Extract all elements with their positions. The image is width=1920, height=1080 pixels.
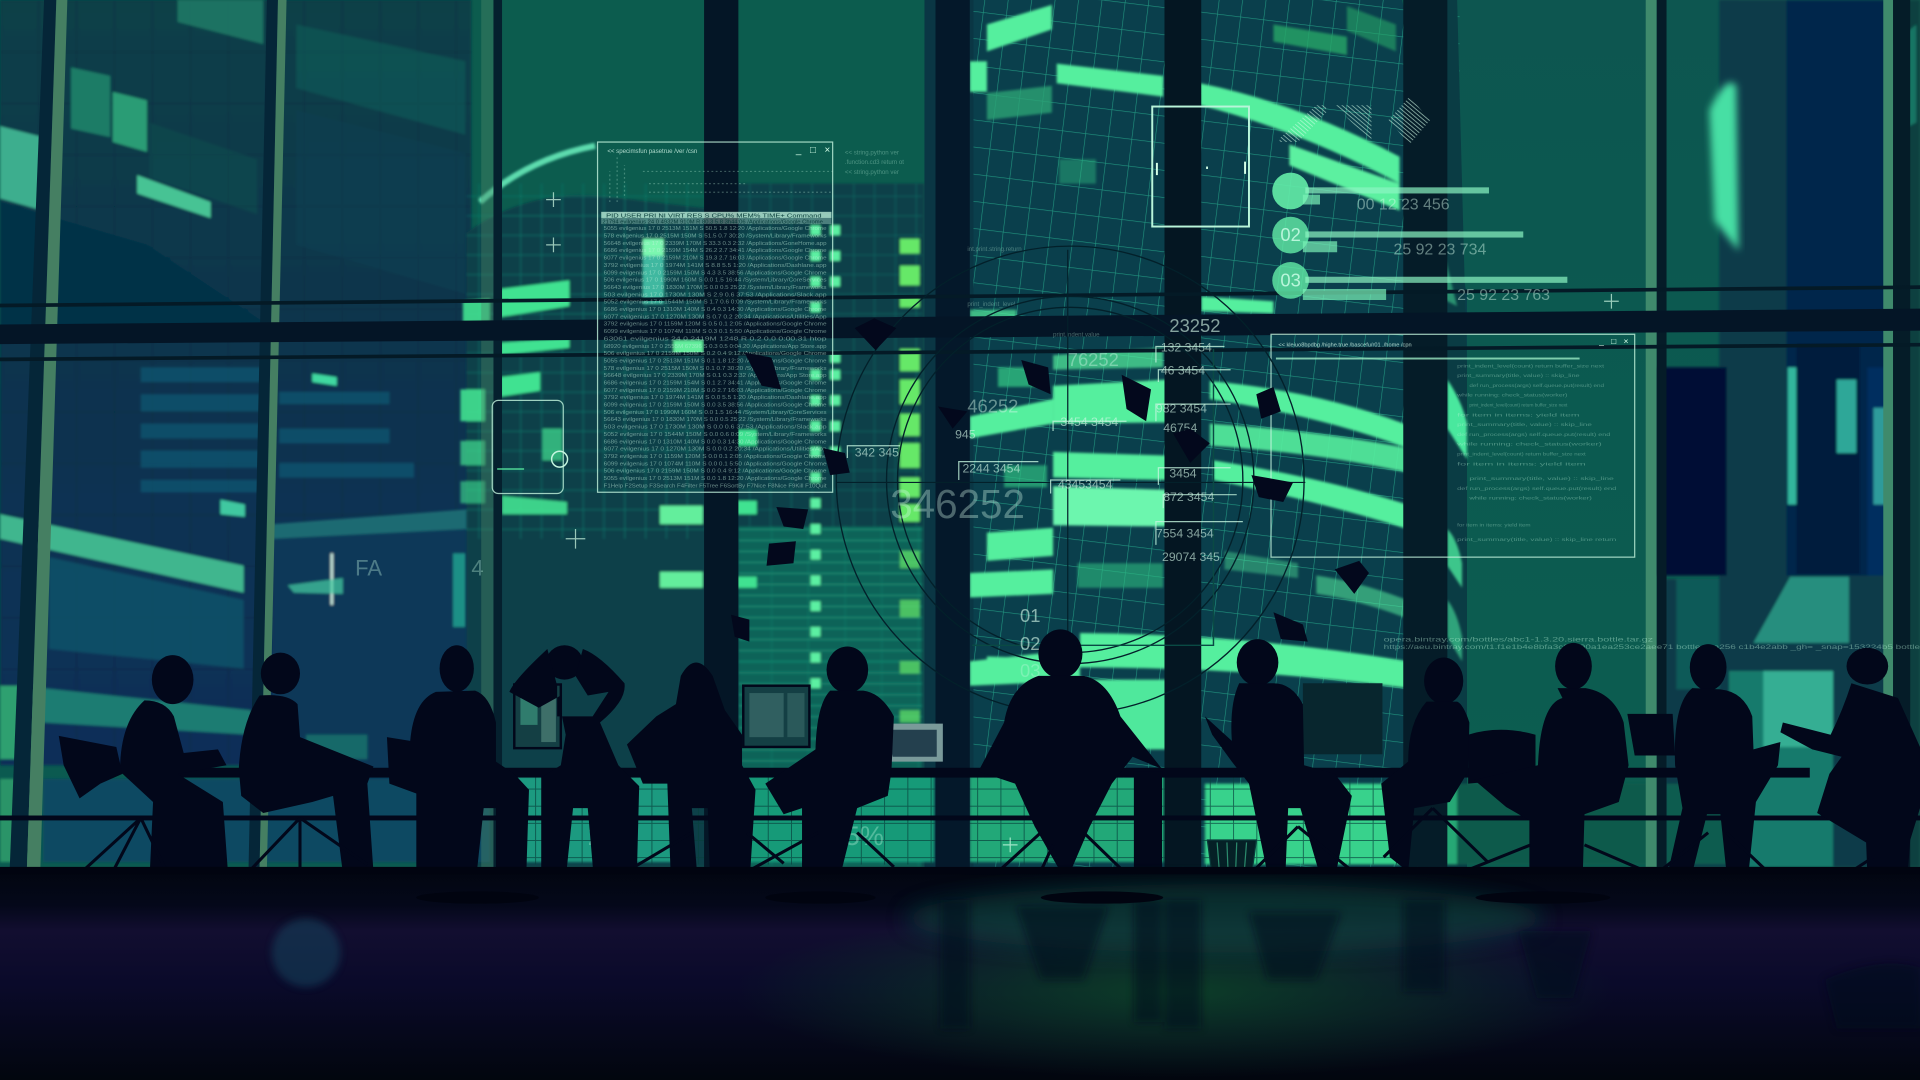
terminal rows: 3792 evilgenius 17 0 1974M 141M S 0.0 5.5 1:20 /Applications/Dashlane.app bbox=[604, 395, 827, 401]
person 9 bbox=[1381, 658, 1536, 872]
lower window glow bbox=[0, 776, 1733, 864]
person 5 bbox=[627, 662, 784, 884]
terminal rows: 506 evilgenius 17 0 2159M 150M S 0.0 0.4 9:12 /Applications/Google Chrome bbox=[604, 469, 827, 475]
faded lower numbers: 20 bbox=[588, 821, 618, 851]
terminal title: << specimsfun pasetrue /ver /csn bbox=[607, 148, 697, 155]
data labels: 2244 3454 bbox=[962, 462, 1020, 476]
laptops bbox=[514, 683, 1382, 762]
data labels: 23252 bbox=[1169, 315, 1220, 336]
terminal rows: 68920 evilgenius 17 0 2555M 67396 S 0.3 0.5 0:04.20 /Applications/App Store.app bbox=[604, 344, 827, 350]
person 7 main bbox=[978, 629, 1162, 882]
terminal rows: 5052 evilgenius 17 0 1544M 150M S 1.7 0.6 0:09 /System/Library/Frameworks bbox=[604, 300, 827, 306]
log lines: while running: check_status(worker) bbox=[1469, 496, 1593, 501]
log lines: def run_process(args) self.queue.put(result) end bbox=[1457, 486, 1617, 491]
data labels: 342 345 bbox=[855, 446, 899, 460]
callout 01: 00 12 23 456 bbox=[1357, 196, 1450, 213]
long table bbox=[0, 768, 1920, 900]
callout 03: 25 92 23 763 bbox=[1457, 287, 1550, 304]
window: right log panel bbox=[1271, 334, 1635, 557]
hud: hatched shapes bbox=[1280, 97, 1430, 144]
terminal rows: 6077 evilgenius 17 0 2159M 210M S 0.0 2.7 16:03 /Applications/Google Chrome bbox=[604, 388, 827, 394]
log lines: print_indent_level(count) return buffer_size next bbox=[1457, 452, 1587, 457]
hud: square frame bbox=[1152, 107, 1249, 227]
reflective floor bbox=[0, 867, 1920, 1080]
log lines: def run_process(args) self.queue.put(result) end bbox=[1457, 432, 1611, 437]
terminal rows: 6077 evilgenius 17 0 1270M 130M S 0.7 0.2 20:34 /Applications/Utilities/App bbox=[604, 314, 827, 320]
terminal header row bbox=[601, 212, 831, 225]
terminal rows: 3792 evilgenius 17 0 1159M 120M S 0.0 0.1 2:05 /Applications/Google Chrome bbox=[604, 454, 827, 460]
data labels: 3454 3454 bbox=[1060, 415, 1118, 429]
terminal rows: 503 evilgenius 17 0 1730M 130M S 2.9 0.6 37:53 /Applications/Slack.app bbox=[604, 292, 827, 298]
faded lower numbers bbox=[355, 556, 884, 851]
terminal rows: 6099 evilgenius 17 0 1074M 110M S 0.3 0.1 5:50 /Applications/Google Chrome bbox=[604, 329, 827, 335]
log lines: print_indent_level(count) return buffer_size next bbox=[1469, 403, 1568, 408]
faint code fragments: int.print.string.return bbox=[967, 246, 1022, 253]
terminal rows: 6686 evilgenius 17 0 1310M 140M S 0.4 0.3 14:30 /Applications/Google Chrome bbox=[604, 307, 827, 313]
person 6 bbox=[747, 647, 894, 896]
wastebasket bbox=[1207, 840, 1256, 877]
terminal rows: 56648 evilgenius 17 0 2339M 170M S 0.1 0.3 2:32 /Applications/App Store.app bbox=[604, 373, 827, 379]
log lines: print_summary(title, value) :: skip_line bbox=[1469, 476, 1615, 481]
person 12 bbox=[1780, 648, 1920, 906]
faded lower numbers: 5% bbox=[845, 821, 884, 851]
callout 02 bbox=[1272, 217, 1523, 259]
callout 02: 02 bbox=[1280, 224, 1301, 245]
data labels: 46252 bbox=[967, 396, 1018, 417]
terminal rows: 503 evilgenius 17 0 1730M 130M S 0.0 0.6 37:53 /Applications/Slack.app bbox=[604, 425, 827, 431]
laptop screen 4 bbox=[1303, 683, 1382, 754]
faded lower numbers: FA bbox=[355, 556, 382, 581]
plus markers bbox=[546, 192, 1619, 852]
person 3 bbox=[387, 645, 529, 900]
terminal rows: 56643 evilgenius 17 0 1830M 170M S 0.0 0.5 25:22 /System/Library/Frameworks bbox=[604, 285, 827, 291]
data labels: 43453454 bbox=[1058, 478, 1113, 492]
faint code fragments: << string.python ver bbox=[845, 169, 899, 176]
laptop screen 1 bbox=[514, 684, 561, 748]
log lines: for item in items: yield item bbox=[1457, 523, 1531, 528]
terminal rows: 3792 evilgenius 17 0 1159M 120M S 0.5 0.1 2:05 /Applications/Google Chrome bbox=[604, 322, 827, 328]
silhouette reflections bbox=[940, 900, 1920, 1029]
callout 03: 03 bbox=[1280, 270, 1301, 291]
faint code fragments bbox=[845, 149, 1100, 339]
data labels: 46754 bbox=[1163, 421, 1197, 435]
left office building bbox=[0, 0, 471, 765]
data labels: 7554 3454 bbox=[1156, 527, 1214, 541]
terminal rows: 6099 evilgenius 17 0 2159M 150M S 0.0 3.5 38:56 /Applications/Google Chrome bbox=[604, 403, 827, 409]
log lines bbox=[1457, 363, 1617, 542]
flying papers bbox=[731, 318, 1369, 642]
log lines: while running: check_status(worker) bbox=[1457, 442, 1603, 447]
small corner panel bbox=[492, 400, 568, 493]
terminal rows: 506 evilgenius 17 0 1990M 160M S 0.0 1.5 16:44 /System/Library/CoreServices bbox=[604, 410, 827, 416]
terminal rows: 506 evilgenius 17 0 1990M 160M S 0.0 1.5 16:44 /System/Library/CoreServices bbox=[604, 278, 827, 284]
laptop screen 3 bbox=[879, 724, 943, 762]
label brackets bbox=[847, 347, 1243, 545]
command line text: opera.bintray.com/bottles/abc1-1.3.20.sierra.bottle.tar.gz bbox=[1384, 637, 1653, 644]
terminal rows: 6686 evilgenius 17 0 1310M 140M S 0.0 0.3 14:30 /Applications/Google Chrome bbox=[604, 439, 827, 445]
data labels: 3454 bbox=[1169, 467, 1197, 481]
terminal rows: 5055 evilgenius 17 0 2513M 151M S 0.0 1.8 12:20 /Applications/Google Chrome bbox=[604, 476, 827, 482]
central curved tower bbox=[924, 0, 1467, 867]
terminal rows: 6099 evilgenius 17 0 1074M 110M S 0.0 0.1 5:50 /Applications/Google Chrome bbox=[604, 461, 827, 467]
log lines: for item in items: yield item bbox=[1457, 461, 1587, 466]
log title: << kleiuo8bpdbg /highe.true /bascefu/r01 ./home /cpn bbox=[1278, 343, 1412, 349]
terminal rows: 56643 evilgenius 17 0 1830M 170M S 0.0 0.5 25:22 /System/Library/Frameworks bbox=[604, 417, 827, 423]
data labels bbox=[855, 315, 1220, 681]
log lines: print_indent_level(count) return buffer_size next bbox=[1457, 363, 1605, 368]
person 10 bbox=[1463, 643, 1647, 900]
neon building glow bbox=[1709, 83, 1739, 251]
centre-left tower bbox=[460, 146, 924, 867]
callout 02: 25 92 23 734 bbox=[1393, 242, 1486, 259]
person 1 bbox=[55, 655, 229, 896]
data labels: 02 bbox=[1020, 633, 1040, 654]
floor chair disc shadows bbox=[0, 867, 1920, 904]
faint code fragments: print_indent_level bbox=[967, 301, 1015, 308]
person 11 bbox=[1627, 644, 1780, 882]
faded lower numbers: 3: bbox=[710, 821, 733, 851]
terminal rows: 578 evilgenius 17 0 2515M 150M S 51.5 0.7 30:20 /System/Library/Frameworks bbox=[604, 234, 827, 240]
terminal rows: 6077 evilgenius 17 0 1270M 130M S 0.0 0.2 20:34 /Applications/Utilities/App bbox=[604, 447, 827, 453]
log lines: print_summary(title, value) :: skip_line bbox=[1457, 422, 1593, 427]
window controls: _ □ × bbox=[795, 145, 830, 156]
faint code fragments: print.indent value bbox=[1053, 332, 1100, 339]
command line text: https://aeu.bintray.com/t1.f1e1b4e8bfa3c3d590a1ea253ce2aee71 bottle.sha256 c1b4e2abb _gh= _snap=153224b5 bottle bbox=[1384, 644, 1920, 651]
terminal header row: 21794 evilgenius 24 0 4932M 910M R 80.3 5.8 3h44:06 /Applications/Google Chrome bbox=[602, 219, 823, 225]
log lines: print_summary(title, value) :: skip_line return bbox=[1457, 537, 1617, 542]
terminal rows: 6099 evilgenius 17 0 2159M 150M S 4.3 3.5 38:56 /Applications/Google Chrome bbox=[604, 270, 827, 276]
window: terminal process list bbox=[598, 142, 833, 492]
log controls: _ □ × bbox=[1598, 336, 1629, 346]
faint graph bbox=[610, 157, 833, 202]
list: numbered callouts bbox=[1272, 173, 1567, 304]
terminal rows bbox=[604, 226, 827, 489]
terminal rows: 6686 evilgenius 17 0 2159M 154M S 26.2 2.7 34:41 /Applications/Google Chrome bbox=[604, 248, 827, 254]
person 8 bbox=[1205, 639, 1353, 876]
radial chart rings bbox=[836, 246, 1305, 714]
callout 01 bbox=[1272, 173, 1489, 213]
terminal rows: 578 evilgenius 17 0 2515M 150M S 0.1 0.7 30:20 /System/Library/Frameworks bbox=[604, 366, 827, 372]
data labels: 03 bbox=[1020, 660, 1040, 681]
terminal rows: 6686 evilgenius 17 0 2159M 154M S 0.1 2.7 34:41 /Applications/Google Chrome bbox=[604, 380, 827, 386]
faint code fragments: << string.python ver bbox=[845, 149, 899, 156]
log lines: for item in items: yield item bbox=[1457, 412, 1580, 417]
right building bbox=[1649, 0, 1920, 867]
terminal rows: 5055 evilgenius 17 0 2513M 151M S 0.1 1.8 12:20 /Applications/Google Chrome bbox=[604, 358, 827, 364]
data labels: 29074 345 bbox=[1162, 550, 1220, 564]
terminal rows: 63061 evilgenius 24 0 2419M 1248 R 0.2 0.0 0:00.31 htop bbox=[604, 336, 827, 342]
faint code fragments: .function.cd3 return ot bbox=[845, 159, 904, 166]
log lines: print_summary(title, value) :: skip_line bbox=[1457, 373, 1580, 378]
laptop screen 2 bbox=[743, 686, 809, 747]
data labels: 46 3454 bbox=[1161, 364, 1205, 378]
data labels: 01 bbox=[1020, 605, 1040, 626]
terminal rows: F1Help F2Setup F3Search F4Filter F5Tree F6SortBy F7Nice F8Nice F9Kill F10Quit bbox=[604, 483, 827, 489]
right sky panel bbox=[1445, 0, 1739, 869]
data labels: 76252 bbox=[1068, 349, 1119, 370]
terminal header row: PID USER PRI NI VIRT RES S CPU% MEM% TIME+ Command bbox=[606, 213, 822, 219]
data labels: 982 3454 bbox=[1156, 402, 1207, 416]
person 2 bbox=[239, 653, 373, 887]
terminal rows: 5052 evilgenius 17 0 1544M 150M S 0.0 0.6 0:09 /System/Library/Frameworks bbox=[604, 432, 827, 438]
data labels: 945 bbox=[955, 427, 976, 441]
person 4 bbox=[509, 645, 639, 879]
terminal rows: 506 evilgenius 17 0 2159M 150M S 0.2 0.4 9:12 /Applications/Google Chrome bbox=[604, 351, 827, 357]
faded lower numbers: 4 bbox=[471, 556, 484, 581]
terminal rows: 5055 evilgenius 17 0 2513M 151M S 50.5 1.8 12:20 /Applications/Google Chrome bbox=[604, 226, 827, 232]
log lines: while running: check_status(worker) bbox=[1457, 393, 1568, 398]
low dark building bbox=[273, 509, 700, 784]
terminal rows: 56648 evilgenius 17 0 2339M 170M S 33.3 0.3 2:32 /Applications/GoneHome.app bbox=[604, 241, 827, 247]
log highlight line bbox=[1276, 358, 1580, 360]
data labels: 872 3454 bbox=[1163, 490, 1214, 504]
data labels: 132 3454 bbox=[1161, 340, 1212, 354]
log lines: def run_process(args) self.queue.put(result) end bbox=[1469, 383, 1605, 388]
data labels: 346252 bbox=[890, 481, 1025, 527]
terminal rows: 6077 evilgenius 17 0 2159M 210M S 19.3 2.7 16:03 /Applications/Google Chrome bbox=[604, 256, 827, 262]
terminal rows: 3792 evilgenius 17 0 1974M 141M S 8.8 5.5 1:20 /Applications/Dashlane.app bbox=[604, 263, 827, 269]
callout 03 bbox=[1272, 262, 1567, 304]
command line text bbox=[1384, 637, 1920, 651]
